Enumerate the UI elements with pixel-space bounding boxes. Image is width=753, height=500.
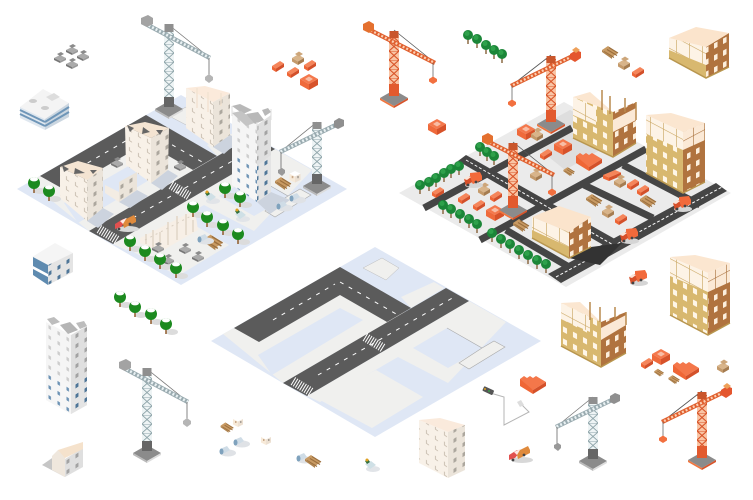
ground and roads of left site: [17, 95, 347, 285]
bricks group top centre: [272, 52, 318, 90]
office block: striped: [20, 89, 69, 130]
building: gold top right: [669, 27, 729, 78]
building: back cream block: [186, 86, 230, 147]
red truck isolated: [509, 446, 533, 463]
building: gold tall lower right: [670, 255, 730, 335]
office block: blue: [32, 243, 73, 285]
gray rubble on the lot: [111, 157, 204, 265]
small cars: [205, 190, 250, 222]
crane: orange on site: [482, 133, 556, 220]
logs and cylinder: [198, 234, 223, 250]
red truck: [115, 215, 139, 232]
building: cream isolated: [419, 418, 465, 478]
panel: right orange construction site: [399, 47, 731, 287]
crane: gray mirrored lower: [554, 393, 620, 471]
crane: orange mirrored: [508, 47, 581, 134]
building: gold low front: [532, 206, 591, 258]
icon: gray rubble pile: [54, 44, 89, 69]
orange van: [629, 270, 648, 286]
small materials bottom: [220, 416, 271, 456]
logs group top right: [602, 46, 644, 78]
ground: [399, 102, 731, 287]
snowy trees: [28, 177, 252, 279]
materials lower right: [641, 349, 729, 384]
building: middle cream block: [125, 122, 169, 183]
site materials right: [275, 171, 306, 212]
road network: [424, 128, 727, 283]
crane: gray lower left: [119, 359, 191, 463]
street light and traffic signal: [482, 386, 529, 425]
crane: orange top: [363, 21, 437, 108]
building: tall white tower: [232, 104, 271, 202]
low unfinished building: [42, 442, 83, 477]
green tree rows on site: [415, 142, 551, 273]
panel: blank road map: [211, 247, 541, 437]
building: small low block: [105, 172, 137, 202]
crane: tall gray: [141, 15, 213, 119]
site materials back: [432, 124, 602, 221]
tree row top: [463, 30, 507, 63]
isolated orange box: [428, 119, 446, 135]
building: white tower isolated: [46, 317, 87, 414]
building shadows on road: [569, 243, 622, 265]
low wall blocks: [140, 210, 198, 252]
crane: mirrored gray: [278, 118, 344, 196]
trucks on roads: [464, 172, 692, 244]
lot highlights: [540, 110, 700, 185]
materials bottom centre: [296, 453, 380, 472]
orange stairs block: [520, 376, 546, 394]
building: front cream block: [60, 161, 103, 221]
tree row snowy: [114, 291, 178, 335]
building: gold frame lower: [561, 302, 626, 367]
crane: orange mirrored lower: [659, 383, 732, 470]
site materials lower right: [513, 170, 656, 232]
panel: left winter construction site: [17, 15, 347, 285]
building: gold frame back left: [573, 90, 636, 157]
building: gold tall back right: [646, 113, 705, 193]
building shadows: [87, 135, 290, 228]
